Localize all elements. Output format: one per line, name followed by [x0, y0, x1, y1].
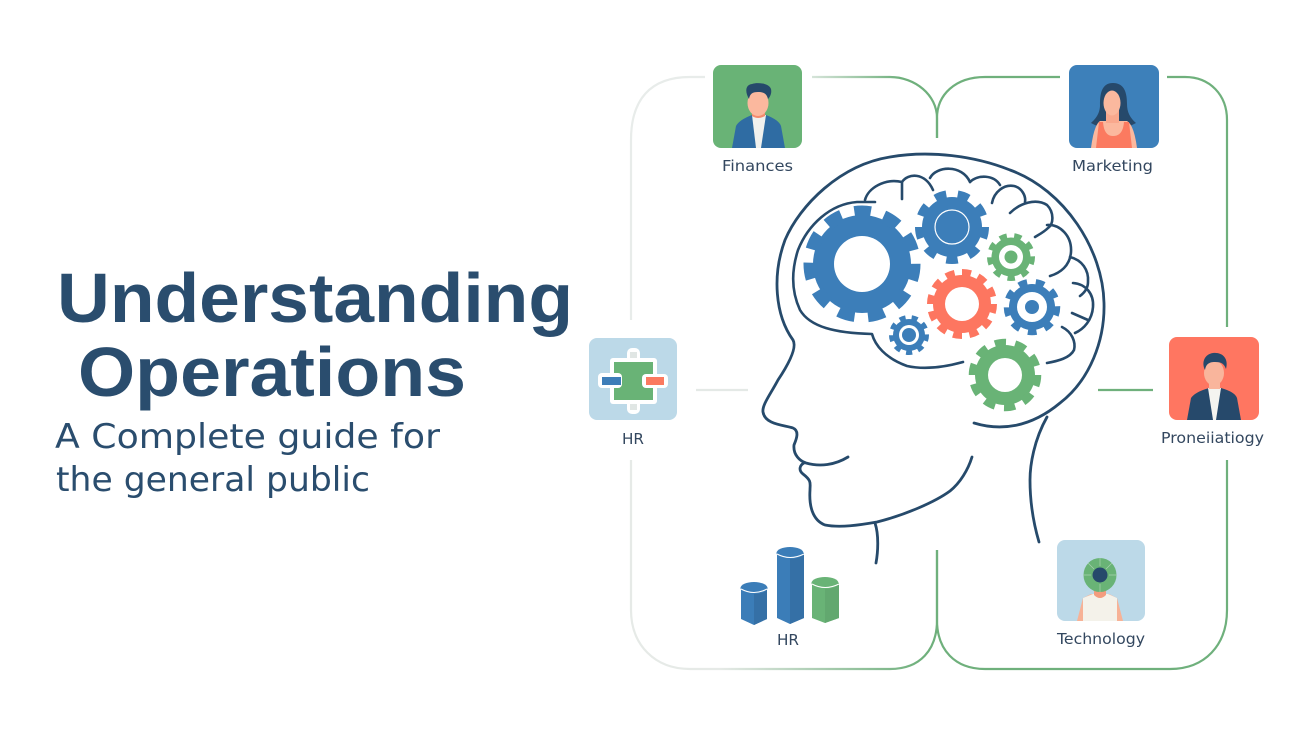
gear: top blue: [920, 195, 984, 259]
card: HR puzzle: [589, 338, 677, 448]
subtitle: [55, 417, 440, 500]
label: Technology: Technology: [1056, 631, 1145, 648]
title: [57, 259, 573, 411]
brain outline: [793, 169, 1093, 368]
card: Proneiiatiogy: [1161, 337, 1264, 447]
gear: tiny blue: [892, 318, 926, 352]
gear: lower green: [973, 343, 1037, 407]
label: Finances: Finances: [722, 158, 793, 175]
bar chart icon: [740, 547, 839, 649]
label: HR bottom: HR: [777, 632, 799, 649]
subtitle: A Complete guide for: [55, 417, 440, 457]
card: Technology: [1056, 540, 1145, 648]
head outline: [763, 154, 1104, 563]
subtitle: the general public: [56, 460, 370, 500]
label: HR left: HR: [622, 431, 644, 448]
card: Marketing: [1069, 65, 1159, 175]
label: Marketing: Marketing: [1072, 158, 1153, 175]
label: Proneiiatiogy: Proneiiatiogy: [1161, 430, 1264, 447]
gear: small green: [990, 236, 1032, 278]
title: Operations: [78, 333, 466, 411]
title: Understanding: [57, 259, 573, 337]
connector frame: [631, 77, 1227, 669]
gear: coral: [931, 273, 993, 335]
gear: large blue: [810, 212, 914, 316]
card: Finances: [713, 65, 802, 175]
gear: right blue: [1007, 282, 1057, 332]
